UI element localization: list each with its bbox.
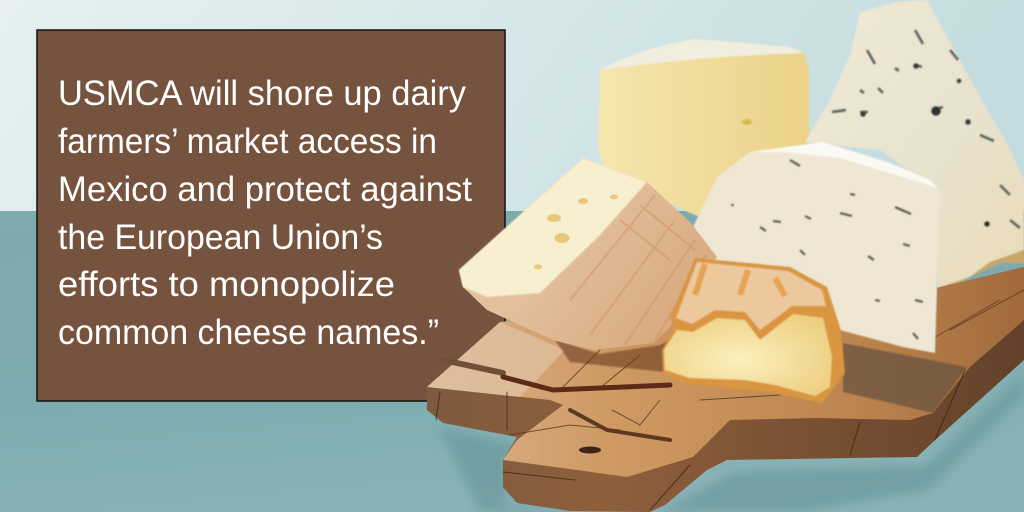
cheese: rind wedge left xyxy=(459,158,717,372)
background table xyxy=(0,211,1024,512)
board light corner xyxy=(427,322,565,397)
cutting board xyxy=(427,267,1024,512)
quote text: efforts to monopolize xyxy=(58,265,395,304)
cheese: white herb wedge xyxy=(693,142,940,353)
soft interior xyxy=(664,314,832,396)
quote text: Mexico and protect against xyxy=(58,170,472,209)
quote panel xyxy=(37,30,505,401)
wedge rind xyxy=(459,158,717,350)
quote text: common cheese names.” xyxy=(58,313,439,352)
background wall xyxy=(0,0,1024,214)
board top surface xyxy=(427,267,1024,477)
quote text: the European Union’s xyxy=(58,218,383,257)
board dark reflection xyxy=(843,343,967,413)
board shadow xyxy=(440,375,1024,512)
board handle hole xyxy=(579,446,601,454)
board side edge xyxy=(427,267,1024,512)
wedge cut face xyxy=(459,158,647,297)
quote text: USMCA will shore up dairy xyxy=(58,74,466,113)
wedge shadow on board xyxy=(555,325,700,372)
quote text xyxy=(58,74,472,352)
cheese: blue wedge right xyxy=(805,0,1024,288)
cheese: yellow wedge back xyxy=(598,39,809,225)
cheese: orange soft cheese xyxy=(662,258,845,403)
wedge holes xyxy=(534,194,618,270)
wedge rind stripes xyxy=(570,195,706,345)
rind highlights xyxy=(676,262,826,330)
board marble veins xyxy=(436,290,1024,510)
quote text: farmers’ market access in xyxy=(58,122,437,161)
